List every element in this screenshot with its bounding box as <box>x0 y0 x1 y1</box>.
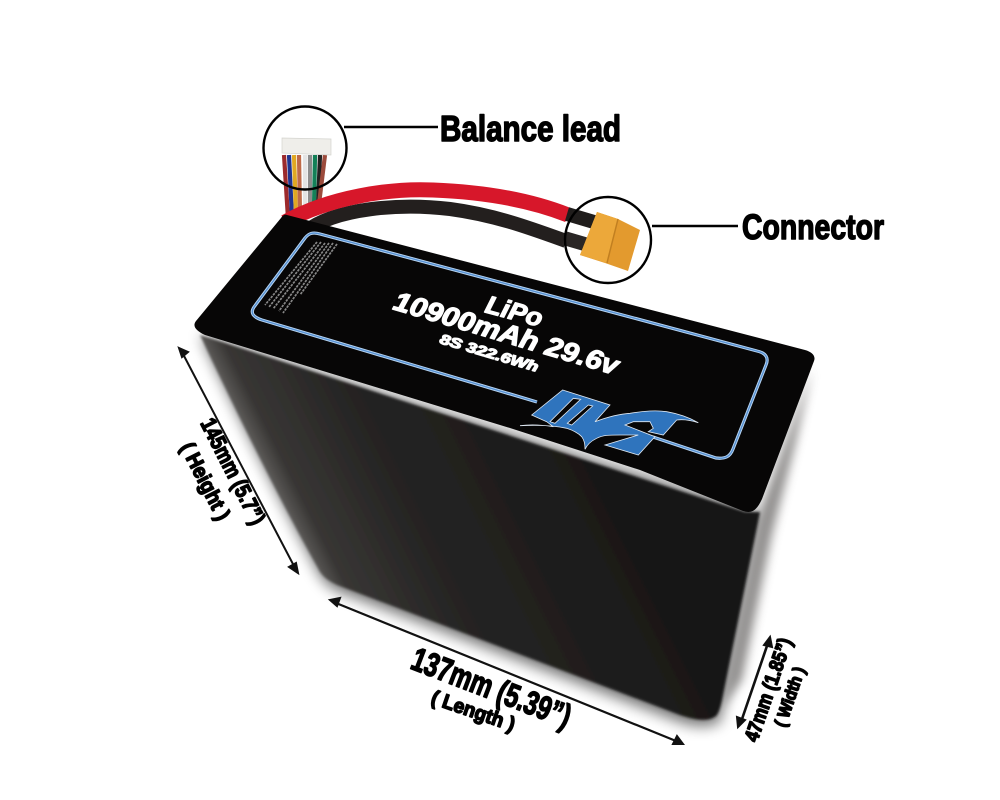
length dimension: 137mm (5.39”) <box>406 640 577 735</box>
height dimension: 145mm (5.7”) <box>196 414 270 529</box>
cells and energy: 8S 322.6Wh <box>438 331 540 375</box>
logo <box>520 390 698 455</box>
balance connector plug <box>282 138 331 155</box>
battery shadow <box>200 335 812 726</box>
callout: balance lead: Balance lead <box>440 108 621 149</box>
callout: connector: Connector <box>742 208 884 247</box>
battery top face <box>194 215 815 512</box>
length dimension <box>330 598 683 744</box>
height dimension <box>176 348 298 573</box>
capacity and voltage: 10900mAh 29.6v <box>390 286 624 382</box>
battery label text <box>390 286 624 382</box>
callout: connector <box>565 197 884 283</box>
width dimension: ( Width ) <box>771 664 809 729</box>
height dimension: ( Height ) <box>176 439 234 524</box>
type: LiPo <box>482 291 546 333</box>
battery front face <box>200 335 760 720</box>
XT connector <box>580 212 640 271</box>
fine print warning block <box>265 242 337 313</box>
balance lead wires <box>282 138 331 218</box>
length dimension: ( Length ) <box>428 687 518 736</box>
callout: balance lead <box>264 106 621 190</box>
power leads <box>285 190 594 245</box>
width dimension: 47mm (1.85”) <box>741 635 797 745</box>
label outline <box>252 233 767 458</box>
